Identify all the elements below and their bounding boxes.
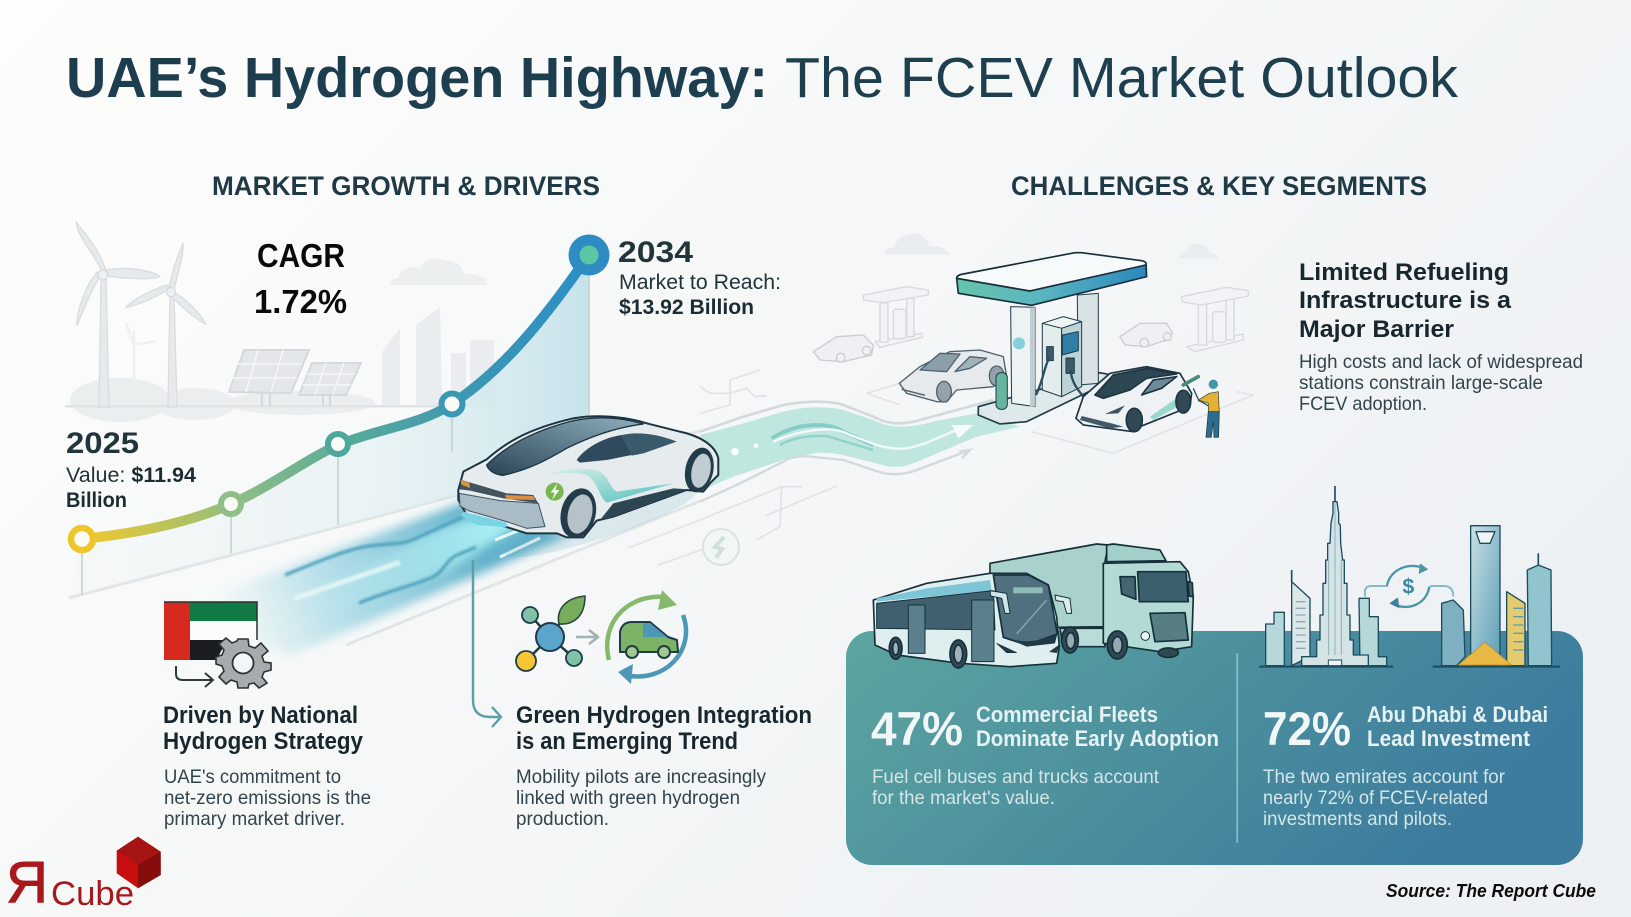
illustration: green hydrogen molecule and car xyxy=(516,590,686,684)
stat: commercial fleets xyxy=(871,702,1219,809)
bus xyxy=(873,573,1072,668)
illustration: UAE flag and gear xyxy=(164,602,271,688)
stat: Abu Dhabi and Dubai: investments and pilots. xyxy=(1263,808,1452,830)
stat: Abu Dhabi and Dubai xyxy=(1263,702,1548,830)
illustration: bus and truck xyxy=(873,544,1193,668)
background clouds xyxy=(884,233,1218,258)
connector arrow xyxy=(473,560,501,727)
text block: refueling infrastructure: Limited Refueling xyxy=(1299,259,1509,286)
title: UAE’s Hydrogen Highway: xyxy=(66,46,768,110)
left towers xyxy=(1266,612,1284,666)
text block: national hydrogen strategy: net-zero emissions is the xyxy=(164,787,371,809)
callout: 2034 value: $13.92 Billion xyxy=(619,296,754,319)
text block: national hydrogen strategy xyxy=(163,702,371,830)
stat: Abu Dhabi and Dubai: 72% xyxy=(1263,702,1351,755)
callout: 2034 value: Market to Reach: xyxy=(619,271,781,294)
teal wave road to the station xyxy=(700,407,1020,493)
front column xyxy=(1011,307,1035,407)
heading: challenges and key segments: CHALLENGES & KEY SEGMENTS xyxy=(1011,171,1427,201)
text block: refueling infrastructure: Infrastructure is a xyxy=(1299,287,1512,314)
callout: 2025 value xyxy=(66,427,196,512)
text block: refueling infrastructure: stations constrain large-scale xyxy=(1299,372,1543,394)
callout: 2025 value: Value: $11.94 xyxy=(66,464,196,487)
stat: Abu Dhabi and Dubai: The two emirates account for xyxy=(1263,766,1505,788)
stat: Abu Dhabi and Dubai: nearly 72% of FCEV-related xyxy=(1263,787,1488,809)
illustration: hydrogen station xyxy=(813,233,1253,453)
text block: green hydrogen integration: production. xyxy=(516,808,609,830)
text block: refueling infrastructure: Major Barrier xyxy=(1299,316,1454,343)
stat: commercial fleets: for the market's value. xyxy=(872,787,1055,809)
text block: green hydrogen integration: Green Hydrogen Integration xyxy=(516,702,812,729)
back column xyxy=(1077,293,1098,385)
callout: 2025 value: 2025 xyxy=(66,427,139,460)
text block: green hydrogen integration: linked with green hydrogen xyxy=(516,787,740,809)
road with hydrogen trail xyxy=(69,400,1020,655)
investment symbol xyxy=(1365,563,1453,608)
nozzle xyxy=(1183,377,1198,385)
attendant xyxy=(1193,380,1219,437)
Burj tower xyxy=(1332,486,1337,502)
stat: commercial fleets: Dominate Early Adoption xyxy=(976,726,1219,751)
illustration: fuel cell car xyxy=(458,416,718,568)
left car xyxy=(899,350,1007,402)
text block: refueling infrastructure: FCEV adoption. xyxy=(1299,393,1427,415)
callout: 2034 value: 2034 xyxy=(618,236,693,269)
CAGR callout xyxy=(254,237,347,320)
title: The FCEV Market Outlook xyxy=(785,46,1458,110)
right towers xyxy=(1442,600,1465,666)
stat: commercial fleets: Commercial Fleets xyxy=(976,702,1158,727)
heading: market growth and drivers: MARKET GROWTH & DRIVERS xyxy=(212,171,600,201)
text block: national hydrogen strategy: primary market driver. xyxy=(164,808,345,830)
text block: green hydrogen integration: is an Emerging Trend xyxy=(516,728,738,755)
source note: Source: The Report Cube xyxy=(1386,880,1596,901)
faint hydrogen road marker and circuit lines xyxy=(700,370,837,565)
callout: 2025 value: Billion xyxy=(66,489,127,512)
text block: green hydrogen integration: Mobility pilots are increasingly xyxy=(516,766,766,788)
logo: RCube xyxy=(6,837,161,915)
illustration: Abu Dhabi and Dubai skyline: $ xyxy=(1402,575,1414,599)
truck xyxy=(990,544,1193,659)
callout: 2034 value xyxy=(618,236,781,319)
station platform xyxy=(978,373,1120,424)
distant station left xyxy=(863,287,928,347)
text block: refueling infrastructure xyxy=(1299,259,1583,415)
stat: commercial fleets: 47% xyxy=(871,702,963,755)
stat: commercial fleets: Fuel cell buses and trucks account xyxy=(872,766,1160,788)
logo: RCube: Cube xyxy=(51,875,134,913)
dispenser xyxy=(1042,317,1082,397)
text block: refueling infrastructure: High costs and lack of widespread xyxy=(1299,351,1583,373)
backdrop: renewable energy and skyline xyxy=(65,222,494,422)
stat: Abu Dhabi and Dubai: Abu Dhabi & Dubai xyxy=(1367,702,1548,727)
panel: key segments xyxy=(846,631,1583,865)
text block: national hydrogen strategy: Driven by National xyxy=(163,702,358,729)
distant station right xyxy=(1182,287,1248,352)
text block: green hydrogen integration xyxy=(516,702,812,830)
distant cars xyxy=(813,323,1173,362)
title xyxy=(66,46,1458,110)
canopy xyxy=(957,253,1147,305)
CAGR callout: 1.72% xyxy=(254,283,347,320)
green tank xyxy=(996,373,1007,409)
stat: Abu Dhabi and Dubai: Lead Investment xyxy=(1367,726,1531,751)
market growth line chart xyxy=(69,234,610,598)
CAGR callout: CAGR xyxy=(257,237,345,274)
parking bays xyxy=(867,383,1253,453)
text block: national hydrogen strategy: Hydrogen Strategy xyxy=(163,728,364,755)
logo: RCube: Я xyxy=(6,850,48,915)
illustration: Abu Dhabi and Dubai skyline xyxy=(1259,486,1560,667)
text block: national hydrogen strategy: UAE's commitment to xyxy=(164,766,341,788)
right car xyxy=(1076,367,1192,432)
ground lines xyxy=(1259,664,1560,670)
